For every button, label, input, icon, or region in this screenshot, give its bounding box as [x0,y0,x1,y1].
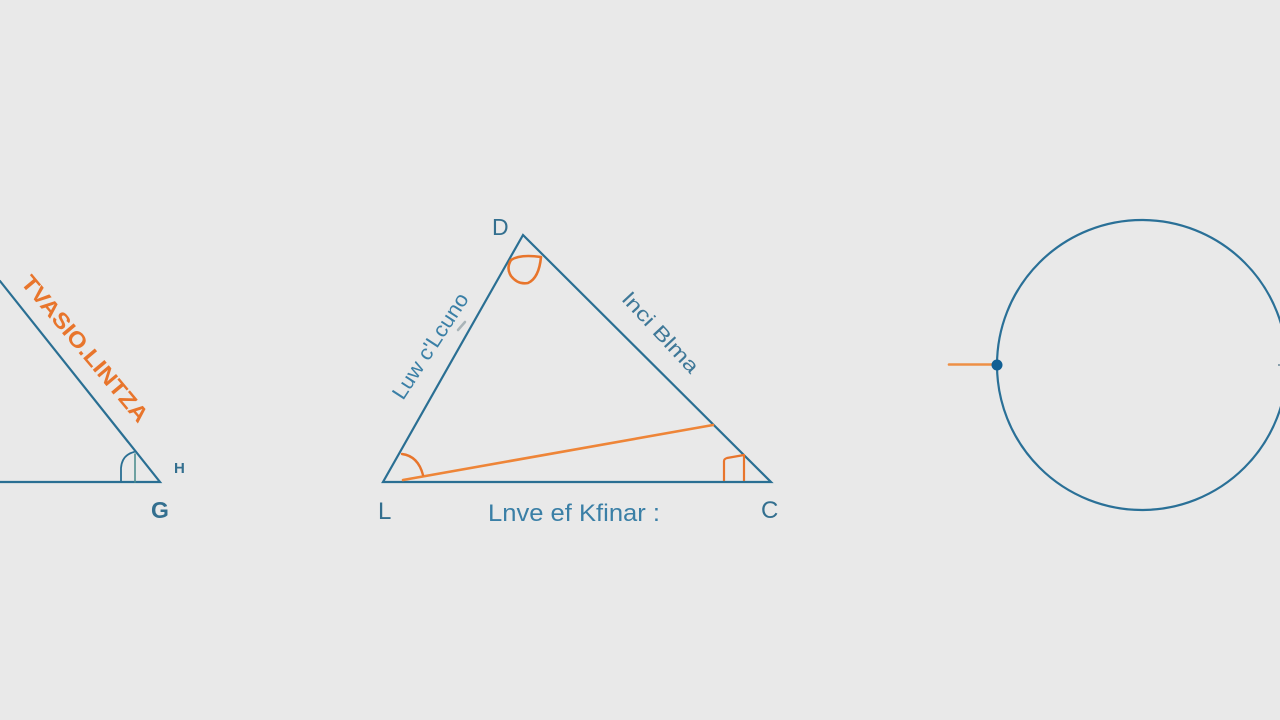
left side tick [458,322,465,330]
right angle mark [724,455,744,481]
vertex label C: C [761,497,778,524]
left vertex label G: G [151,497,169,523]
left vertex mark: H [174,460,185,477]
right side label: lnci Blma [617,288,704,379]
base label: Lnve ef Kfinar : [488,500,660,527]
left partial triangle [0,281,160,482]
circle [997,220,1280,510]
orange cevian [403,425,713,480]
left side label: Luw c'Lcuno [388,289,474,404]
right edge tick [1278,364,1280,366]
top angle mark [508,256,541,283]
left side orange label: TVASIO.LINTZA [16,270,154,427]
main triangle [383,235,771,482]
circle point [992,360,1002,370]
orange tangent line [949,363,996,366]
left angle mark [402,454,423,475]
vertex label D: D [492,214,509,240]
vertex label L: L [378,498,391,525]
